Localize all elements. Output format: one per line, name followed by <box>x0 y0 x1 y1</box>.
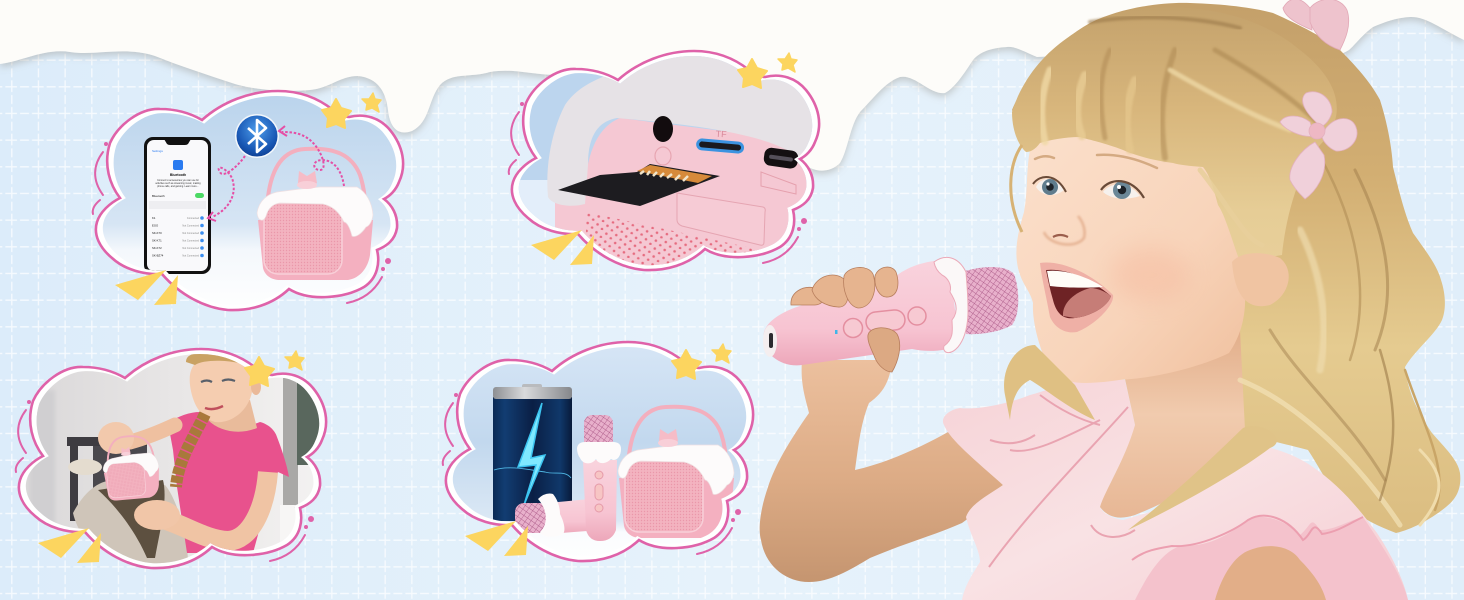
ear <box>1232 253 1289 306</box>
microphone <box>763 257 1018 365</box>
open mouth <box>1040 263 1113 332</box>
smartphone: Not Connected <box>182 247 200 250</box>
sleeve under frill <box>1135 517 1408 600</box>
face <box>1016 132 1245 383</box>
girl singing into microphone <box>760 0 1460 600</box>
cloud accents: stars and pointers <box>443 344 741 556</box>
raised arm <box>760 360 1003 582</box>
raised hand <box>98 422 134 454</box>
USB-C port <box>763 147 799 169</box>
near arm <box>1215 546 1326 600</box>
smartphone: SK-K71 <box>152 238 162 242</box>
fingers wrapped around microphone <box>791 267 900 372</box>
girl with speaker scene <box>26 354 320 564</box>
neck <box>1100 330 1245 518</box>
smartphone: SK-K70 <box>152 231 162 235</box>
smartphone: K1 <box>152 216 156 220</box>
smartphone: SK-BZ74 <box>152 254 164 258</box>
smartphone: SK-K72 <box>152 246 162 250</box>
smartphone: Connected <box>187 217 200 220</box>
cloud panel: portable carry photo <box>15 345 335 571</box>
microphone grille <box>962 267 1018 334</box>
battery icon <box>493 384 572 521</box>
nose <box>1044 216 1085 245</box>
dress creases <box>989 395 1135 567</box>
speaker holes <box>586 214 752 266</box>
cloud accents: stars and pointers <box>93 93 391 305</box>
bluetooth icon <box>235 114 279 158</box>
cloud panel: memory card ports <box>505 48 830 280</box>
smartphone: phone calls, and gaming. Learn more... <box>157 185 199 188</box>
smartphone: Not Connected <box>182 224 200 228</box>
smartphone: Not Connected <box>182 254 200 258</box>
smartphone: activities such as streaming music, making <box>155 182 201 185</box>
smartphone: Bluetooth <box>152 194 165 198</box>
hair highlights <box>1042 17 1440 525</box>
microphone buttons <box>844 307 926 338</box>
eyes <box>1033 155 1157 199</box>
hair mass <box>1012 3 1460 533</box>
bow at top of head <box>1283 0 1349 50</box>
hair over shoulder <box>1128 426 1277 530</box>
cheek blush <box>1110 247 1190 303</box>
headphone jack <box>653 116 673 142</box>
bluetooth scene <box>102 96 396 280</box>
stray left strand <box>1011 145 1022 232</box>
memory card <box>558 164 720 206</box>
lower hand <box>134 500 180 530</box>
dotted arrows <box>212 132 344 217</box>
hair curl by chin <box>1004 345 1095 420</box>
speaker <box>257 149 373 280</box>
frill edge <box>1132 516 1363 560</box>
cloud panel: battery and product set <box>440 340 760 566</box>
lying microphone <box>515 494 586 533</box>
dark side table <box>67 437 147 526</box>
smartphone: Not Connected <box>182 240 200 242</box>
microphone handle <box>763 260 960 365</box>
backpack <box>73 480 188 566</box>
battery door <box>677 193 765 245</box>
smartphone: Settings <box>152 149 163 153</box>
USB port on microphone end <box>763 325 777 357</box>
dripping cream top border <box>0 0 1464 171</box>
speaker with handle <box>618 407 734 538</box>
smartphone: Bluetooth <box>170 173 186 177</box>
girl <box>168 412 289 553</box>
white frill collar <box>934 257 968 353</box>
standing microphone <box>577 415 621 541</box>
bangs and crown hair <box>1012 7 1337 262</box>
dress <box>943 378 1408 600</box>
memory card scene <box>518 56 812 266</box>
smartphone: EGO <box>152 224 159 228</box>
mini speaker <box>102 435 159 500</box>
TF card slot <box>696 138 745 154</box>
smartphone <box>144 137 211 274</box>
battery scene <box>452 347 746 541</box>
flower hair clip <box>1280 92 1357 199</box>
cloud accents: stars and pointers <box>509 53 807 265</box>
memory card scene: TF <box>715 129 727 139</box>
cloud panel: bluetooth pairing <box>90 88 410 314</box>
smartphone: Not Connected <box>182 232 200 235</box>
cloud accents: stars and pointers <box>16 351 314 563</box>
smartphone: Connect to accessories you can use for <box>157 179 199 182</box>
